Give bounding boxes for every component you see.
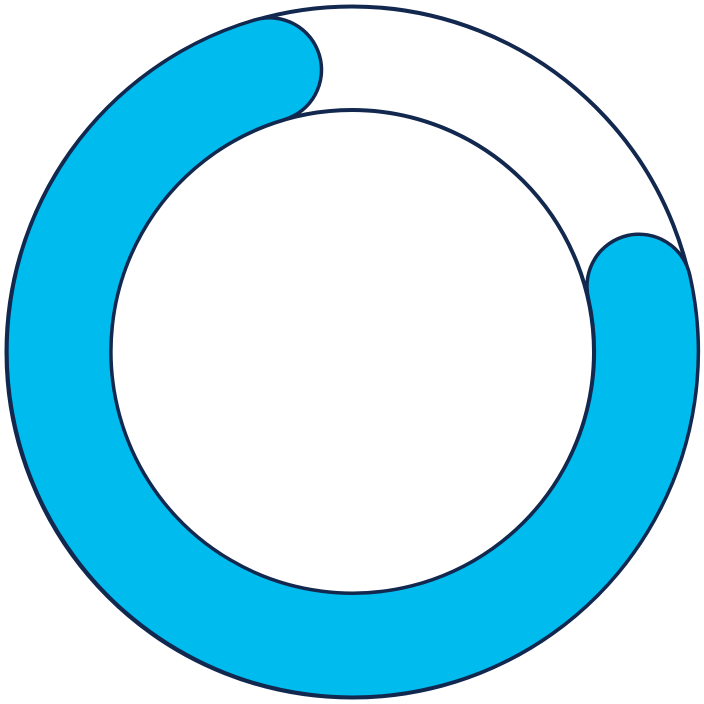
progress arc: [59, 70, 646, 645]
